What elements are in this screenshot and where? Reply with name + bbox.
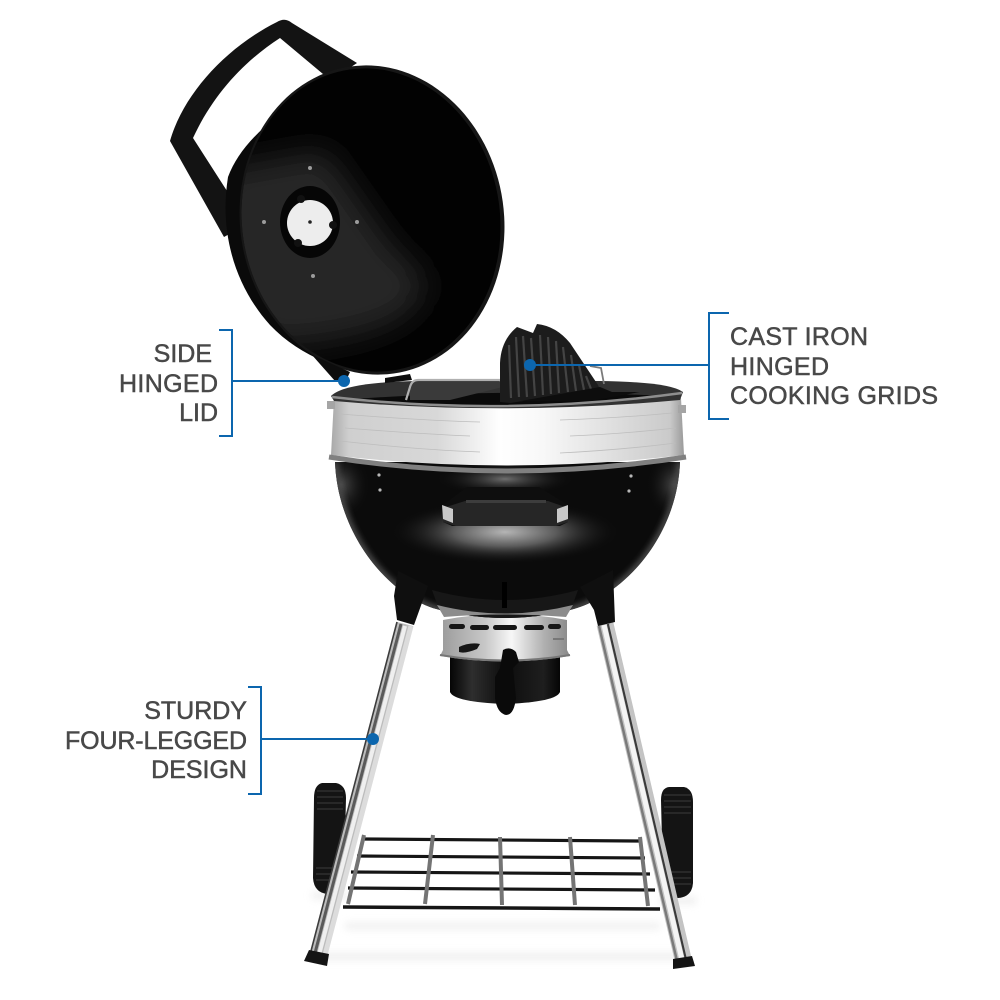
wheels [313,783,693,898]
open lid [226,65,504,383]
callout dot [338,375,350,387]
callout text: DESIGN [151,756,247,784]
callout text: CAST IRON [730,323,868,351]
ash cup handle [495,648,519,715]
foot right [673,956,695,969]
ground shadow [312,892,696,960]
callout text: LID [179,399,218,427]
callout text [119,340,218,427]
bottom wire shelf [343,835,660,909]
callout dot [367,733,379,745]
lid interior [242,68,500,372]
rivets on bowl [377,473,633,493]
socket right [580,570,615,626]
lid handle [170,20,357,237]
callout text: SIDE [154,340,212,368]
callout text: STURDY [144,697,247,725]
vent opening [280,186,340,258]
callout dot [524,359,536,371]
leg: left front [311,622,411,955]
ash catcher and vent assembly [440,614,570,715]
lid rivets [262,166,359,278]
socket left [394,571,428,625]
bowl side handle [442,487,568,526]
hinge [312,355,412,383]
callout text: FOUR-LEGGED [65,727,247,755]
callout: sturdy four-legged design [65,687,379,794]
lower rim [329,457,686,471]
foot left [304,950,329,966]
bowl underside detail [432,590,578,620]
ash cup [450,656,560,704]
vent ring [440,614,570,662]
callout text [730,323,938,410]
callout text: HINGED [730,353,829,381]
leg: right front [599,624,689,961]
callout text: HINGED [119,370,218,398]
charcoal opening [331,380,683,408]
stainless steel collar [327,398,686,471]
collar hooks [327,401,335,409]
callout text: COOKING GRIDS [730,382,938,410]
callout bracket and leader [530,313,729,419]
callout text [65,697,247,784]
callout: side hinged lid [119,330,350,436]
vent slots [449,624,564,653]
callout: cast iron hinged cooking grids [524,313,938,419]
vent plate under bowl [437,605,573,617]
bowl [335,462,680,618]
wheel: left [313,783,346,894]
callout bracket and leader [219,330,344,436]
lid outer shell [226,68,400,374]
side grate [410,382,503,400]
wheel: right [661,787,693,898]
legs [304,570,695,969]
lid rim [220,48,524,392]
cast iron hinged grid [500,324,640,403]
callout bracket and leader [248,687,373,794]
